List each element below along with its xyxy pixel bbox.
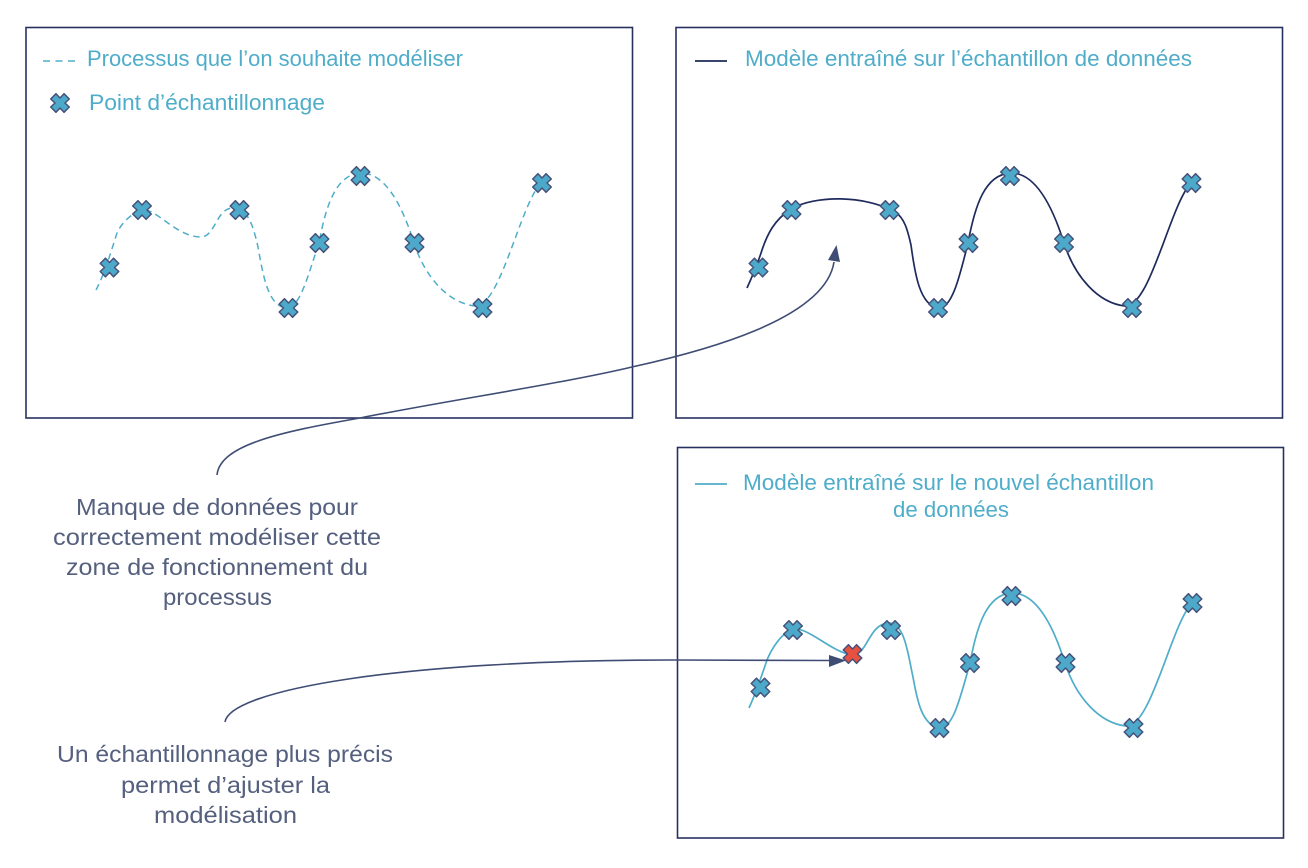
note: finer sampling: Un échantillonnage plus précis xyxy=(57,741,393,767)
legend text: new model xyxy=(743,470,1154,522)
sampling points xyxy=(749,167,1201,317)
note: missing data: Manque de données pour xyxy=(76,494,358,520)
legend: sampling point icon xyxy=(51,94,69,112)
panel: process to model xyxy=(26,28,632,418)
note: finer sampling: permet d’ajuster la xyxy=(121,772,330,798)
legend text: new model: Modèle entraîné sur le nouvel échantillon xyxy=(743,470,1154,495)
legend text: new model: de données xyxy=(893,497,1009,522)
dark model curve xyxy=(747,173,1191,308)
sampling points xyxy=(100,167,551,317)
legend text: process: Processus que l’on souhaite modéliser xyxy=(87,46,463,71)
arrow: to data gap xyxy=(217,245,840,475)
note: missing data: zone de fonctionnement du xyxy=(66,554,368,580)
panel: model trained on sample xyxy=(676,28,1282,418)
note: missing data: correctement modéliser cette xyxy=(53,524,381,550)
note: finer sampling: modélisation xyxy=(154,802,297,828)
light model curve xyxy=(749,593,1192,728)
legend: dashed process line xyxy=(43,60,75,62)
legend: dark model line xyxy=(695,60,727,62)
legend: light model line xyxy=(695,483,727,485)
dashed process curve xyxy=(96,173,541,308)
arrow: to new red point xyxy=(225,655,846,722)
panel: model trained on new sample xyxy=(678,448,1284,838)
new red sampling point xyxy=(843,645,862,663)
note: missing data xyxy=(53,494,381,610)
note: missing data: processus xyxy=(163,584,272,610)
note: finer sampling xyxy=(57,741,393,828)
legend text: trained model: Modèle entraîné sur l’échantillon de données xyxy=(745,46,1192,71)
legend text: sampling point: Point d’échantillonnage xyxy=(89,90,325,115)
sampling points xyxy=(751,587,1202,737)
